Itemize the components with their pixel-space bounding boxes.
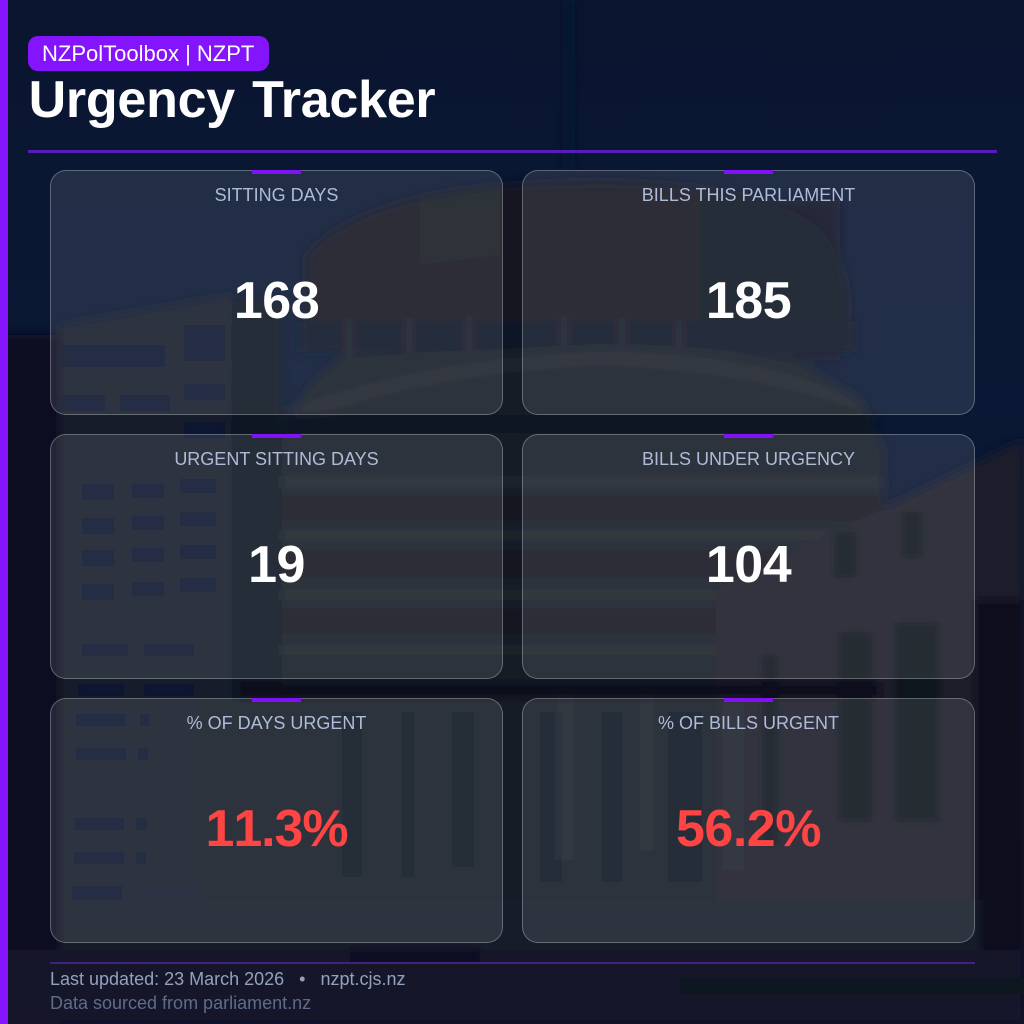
brand pill: NZPolToolbox | NZPT: [42, 41, 254, 66]
panel: bills under urgency: BILLS UNDER URGENCY: [642, 449, 855, 469]
panel: bills this parliament: 185: [706, 272, 791, 330]
panel: urgent sitting days: 19: [248, 536, 305, 594]
dark band between rows: [240, 682, 880, 698]
beehive colonnade: [300, 322, 855, 352]
lower colonnade: [342, 712, 702, 882]
panel: bills under urgency: 104: [706, 536, 791, 594]
footer divider: [50, 962, 975, 964]
panel: sitting days: [50, 170, 503, 415]
panel: sitting days: SITTING DAYS: [215, 185, 338, 205]
panel: percent of bills urgent: % OF BILLS URGENT: [658, 713, 839, 733]
header divider: [28, 150, 997, 153]
left accent stripe: [0, 0, 8, 1024]
panel: sitting days: 168: [234, 272, 319, 330]
footer: last updated and site: Last updated: 23 March 2026 • nzpt.cjs.nz: [50, 969, 406, 989]
panel: percent of days urgent: % OF DAYS URGENT: [187, 713, 366, 733]
spire: [566, 0, 572, 170]
panel: percent of days urgent: 11.3%: [206, 800, 347, 858]
panel: urgent sitting days: [50, 434, 503, 679]
title: Urgency Tracker: [29, 71, 435, 129]
plinth and forecourt: [150, 900, 980, 950]
footer: data source: Data sourced from parliament.nz: [50, 993, 311, 1013]
panel: urgent sitting days: URGENT SITTING DAYS: [174, 449, 379, 469]
right wing: [716, 440, 1024, 1024]
panel: bills this parliament: BILLS THIS PARLIAMENT: [642, 185, 855, 205]
brand pill: [28, 36, 269, 71]
panel: percent of bills urgent: 56.2%: [676, 800, 821, 858]
main building mass: [200, 345, 900, 1000]
left office block: [60, 295, 232, 1024]
beehive upper drum and roof: [306, 181, 848, 345]
panel: bills under urgency: [522, 434, 975, 679]
panel: percent of bills urgent: [522, 698, 975, 943]
far left tower: [0, 335, 60, 1024]
panel: percent of days urgent: [50, 698, 503, 943]
panel: bills this parliament: [522, 170, 975, 415]
